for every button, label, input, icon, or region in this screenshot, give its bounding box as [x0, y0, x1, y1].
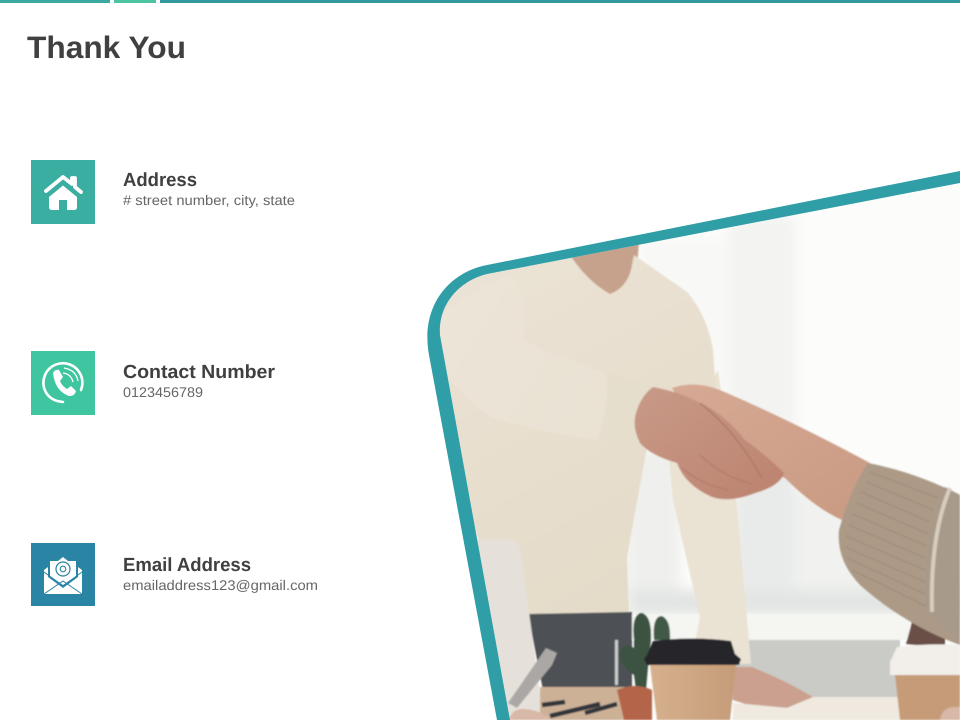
title: Thank You	[27, 30, 186, 65]
coffee cup lid	[644, 638, 741, 665]
raised sleeve	[436, 274, 652, 446]
neck	[555, 225, 640, 298]
lowered sleeve	[668, 370, 751, 664]
icon: envelope	[31, 543, 95, 606]
photo frame: teal border	[427, 171, 960, 720]
plant pot	[617, 686, 652, 720]
sleeve cuff	[597, 373, 652, 446]
photo: handshake scene	[440, 216, 960, 720]
pants	[528, 612, 632, 690]
far arm	[672, 384, 870, 520]
heading: email address: Email Address	[123, 555, 251, 576]
near hand	[509, 709, 552, 720]
contact item: address	[31, 160, 295, 224]
cactus	[620, 613, 651, 690]
clasped hand	[635, 387, 784, 499]
hand on table	[733, 667, 813, 708]
text: phone number: 0123456789	[123, 384, 203, 400]
top accent bar	[0, 0, 960, 3]
icon: phone in circle	[31, 351, 95, 415]
glass	[615, 640, 618, 685]
torso	[435, 250, 716, 618]
dark shape behind sleeve	[906, 622, 945, 648]
window sill and wall	[630, 614, 910, 640]
text: address detail: # street number, city, state	[123, 192, 295, 208]
contact item: email	[31, 543, 318, 606]
heading: address: Address	[123, 170, 197, 191]
brown sleeve	[839, 463, 960, 645]
second cup	[890, 644, 960, 675]
dark pens	[542, 702, 617, 716]
pen	[508, 648, 557, 708]
coffee cup	[650, 665, 736, 720]
heading: contact number: Contact Number	[123, 362, 276, 383]
laptop	[478, 540, 540, 718]
text: email: emailaddress123@gmail.com	[123, 577, 318, 593]
icon: house	[31, 160, 95, 224]
contact item: phone	[31, 351, 276, 415]
table	[732, 696, 900, 720]
